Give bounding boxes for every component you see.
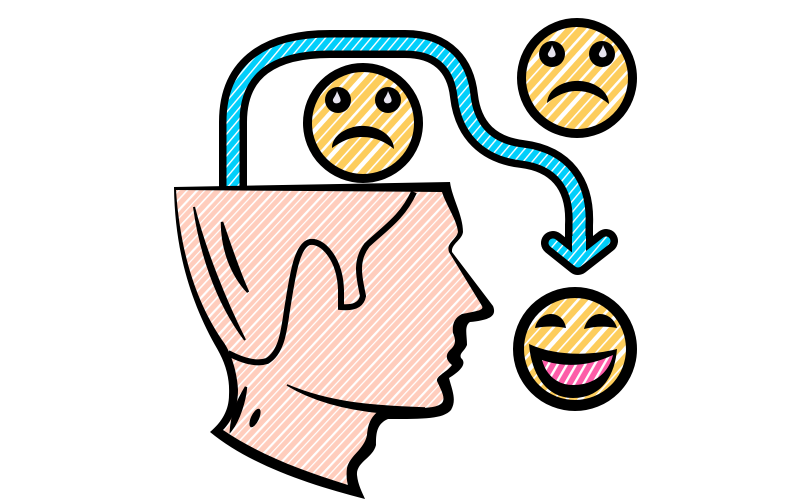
jaw line <box>287 385 425 413</box>
sad face, top right <box>522 22 632 134</box>
smiling eyes <box>535 314 617 329</box>
head profile <box>174 182 494 499</box>
head outline <box>174 182 494 499</box>
frown <box>332 126 394 149</box>
face line: ear and temple <box>228 192 414 362</box>
eyes with tears <box>539 41 615 67</box>
frown <box>547 81 609 104</box>
neck creases <box>231 387 263 430</box>
arrow: from head to happy face <box>233 44 606 263</box>
happy face <box>518 292 632 406</box>
eyes with tears <box>325 87 401 113</box>
head fill <box>176 190 482 485</box>
wrinkle: short temple line <box>222 222 248 292</box>
open mouth <box>529 344 617 398</box>
tongue <box>542 355 613 385</box>
wrinkle: long temple line <box>194 207 245 340</box>
sad face on head <box>308 68 418 178</box>
